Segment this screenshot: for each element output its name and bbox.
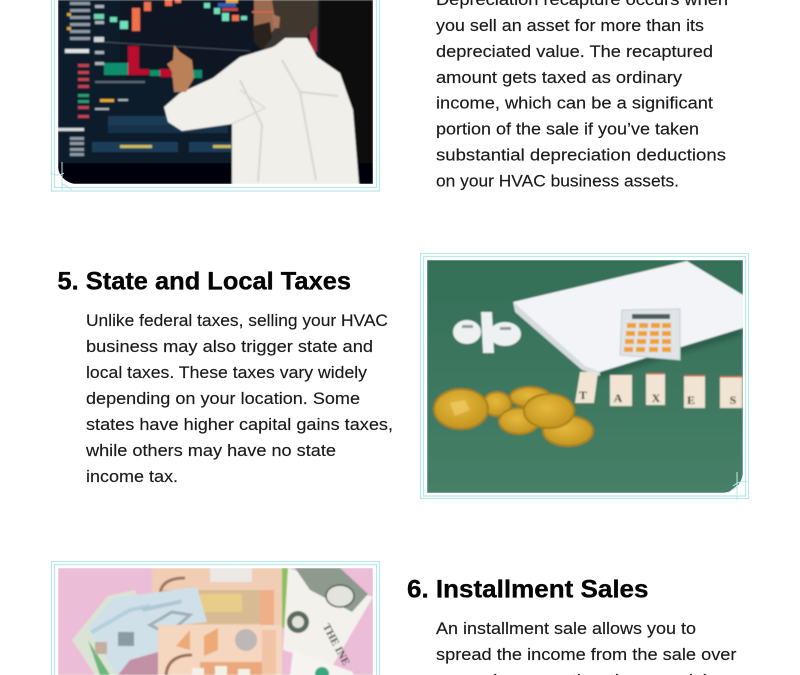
TAXES blocks: S (730, 393, 737, 407)
text block: state and local taxes: income tax. (86, 468, 178, 486)
text block: installment sales (436, 620, 737, 675)
text block: state and local taxes: while others may have no state (85, 442, 336, 460)
white note and dice (290, 650, 353, 675)
gold coins (434, 387, 593, 446)
photo frame (52, 0, 380, 191)
text block: depreciation recapture: you sell an asset for more than its (436, 17, 704, 35)
text block: depreciation recapture: on your HVAC business assets. (436, 172, 679, 190)
text block: depreciation recapture: amount gets taxed as ordinary (436, 69, 683, 87)
photo: banknotes on pink background (52, 562, 380, 675)
photo: coins, calculator and TAXES blocks (420, 254, 749, 500)
TAXES blocks: A (614, 391, 623, 405)
heading: 5. State and Local Taxes: 5. State and Local Taxes (58, 268, 351, 296)
heading: 6. Installment Sales: 6. Installment Sales (407, 576, 648, 604)
blue euro note (87, 587, 207, 675)
top euro note (152, 568, 283, 630)
calculator (620, 309, 680, 360)
frame corner (58, 168, 74, 184)
TAXES blocks: E (687, 393, 695, 407)
dollar note (283, 568, 373, 665)
photo frame (52, 562, 380, 675)
text block: depreciation recapture: income, which can be a significant (436, 94, 713, 112)
text block: depreciation recapture: depreciated value. The recaptured (436, 43, 713, 61)
photo: banknotes on pink background: THE INE (320, 622, 352, 668)
frame corner (724, 474, 743, 493)
man: hand (167, 45, 194, 92)
notebook (513, 261, 743, 372)
text block: state and local taxes: states have higher capital gains taxes, (86, 416, 393, 434)
photo frame (420, 254, 748, 498)
text block: state and local taxes: business may also trigger state and (86, 338, 373, 356)
TAXES blocks (575, 372, 742, 408)
text block: state and local taxes (85, 312, 393, 486)
man: shirt (164, 38, 359, 184)
percent sign (453, 312, 521, 353)
text block: depreciation recapture: substantial depreciation deductions (436, 146, 726, 164)
text block: state and local taxes: depending on your location. Some (86, 390, 360, 408)
green note behind (72, 590, 137, 675)
TAXES blocks: X (652, 391, 661, 405)
text block: state and local taxes: local taxes. These taxes vary widely (86, 364, 368, 382)
photo: man analysing trading charts (50, 0, 380, 191)
front euro note (158, 625, 282, 675)
text block: depreciation recapture: portion of the sale if you’ve taken (436, 120, 699, 138)
text block: installment sales: spread the income from the sale over (436, 646, 737, 664)
text block: state and local taxes: Unlike federal taxes, selling your HVAC (86, 312, 388, 330)
text block: depreciation recapture (436, 0, 728, 190)
TAXES blocks: T (579, 388, 587, 402)
text block: installment sales: An installment sale allows you to (436, 620, 696, 638)
man: head (263, 28, 287, 49)
